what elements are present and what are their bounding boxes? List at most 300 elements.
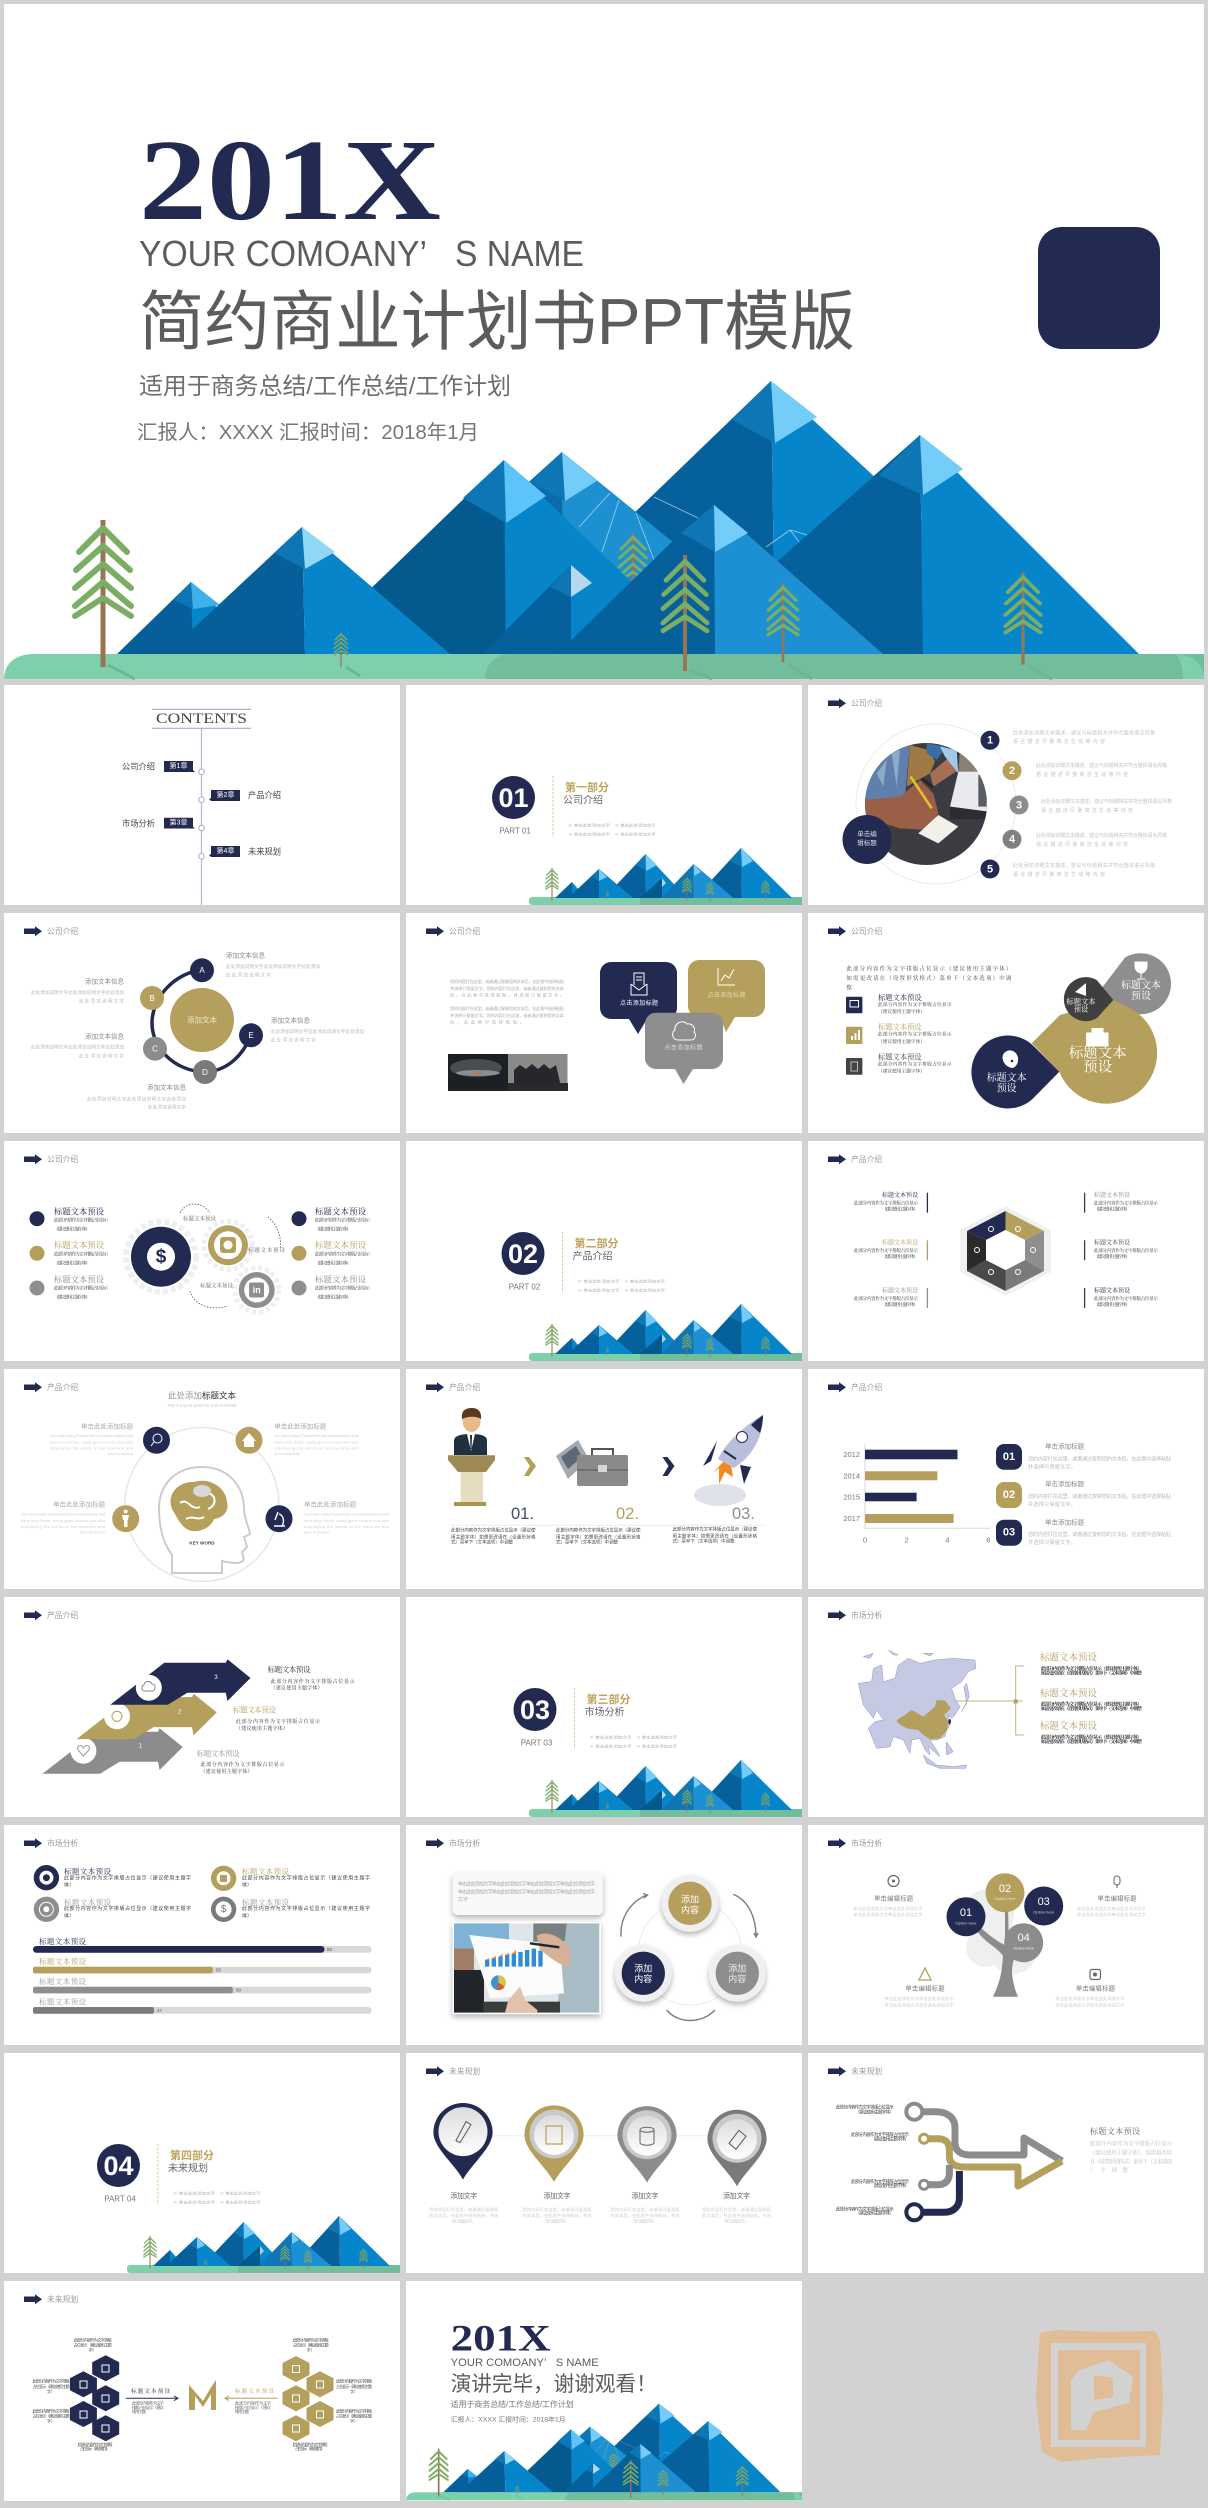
side labels left: 占位显示（建议使用） <box>80 2445 110 2451</box>
section heading group: 02 <box>508 1239 538 1269</box>
item: bottom left: 体） <box>64 1913 74 1920</box>
page label: 公司介绍 <box>47 1154 78 1164</box>
item 4: 此处添加详细文本描述，建议与标题相关并符合整体语言风格 <box>1036 832 1167 839</box>
label: bottom right: 单击此处添加文字单击此处添加文字 <box>1056 2002 1124 2008</box>
title: 简约商业计划书PPT模版 <box>139 285 855 358</box>
label E <box>271 1016 364 1044</box>
intro paragraph: 整 <box>846 983 852 991</box>
page label: 产品介绍 <box>47 1610 78 1620</box>
item 3: 3 <box>1016 799 1022 811</box>
gear: dollar: $ <box>156 1246 167 1268</box>
caption 3: 添加文字 <box>632 2191 658 2200</box>
diagram title: 此处添加标题文本 <box>168 1391 236 1401</box>
list item 3: 标题文本预设 <box>878 1052 922 1062</box>
item 1: 此部分内容作为文字排版占位显示（建议使用主题字体） <box>1041 1665 1142 1672</box>
thin ring <box>638 1901 742 2005</box>
item 2: 2 <box>1009 765 1015 777</box>
right list: 此部分内容作为文字排版占位显示 <box>315 1284 371 1292</box>
panel: closing slide <box>406 2281 802 2501</box>
item 02 <box>996 1479 1171 1508</box>
node B: B <box>149 994 155 1003</box>
step 3 text: 用主题字体）如需更改请在（设置形状格 <box>672 1532 758 1540</box>
item 01 <box>996 1442 1171 1470</box>
bubble: gray: 点击添加标题 <box>664 1044 702 1052</box>
right list: 标题文本预设 <box>315 1240 367 1250</box>
side labels left: 占位显示（建议使用主题 <box>74 2342 112 2348</box>
item 1: 1 <box>987 734 993 746</box>
list item 2: 标题文本预设 <box>878 1022 922 1032</box>
chevron gold <box>524 1457 536 1476</box>
list item 1: （建议使用主题字体） <box>878 1008 925 1015</box>
progress bar 60 <box>33 1976 372 1993</box>
node 04: 04 <box>1018 1932 1030 1944</box>
item: top left <box>34 1865 191 1890</box>
text: item 3: （建议使用主题字体） <box>271 1684 323 1692</box>
item: top left: 此部分内容作为文字排版占位显示（建议使用主题字 <box>64 1874 191 1881</box>
text block: top left: have your finale, being good colours and also <box>50 1440 133 1444</box>
progress bar 60: 60 <box>236 1988 242 1992</box>
side labels left: 字） <box>47 2418 55 2424</box>
label A <box>226 950 320 978</box>
text block: top left: displaying the words of the machine and <box>50 1447 133 1451</box>
paragraph 1 <box>450 978 565 998</box>
teardrop: gray <box>1098 953 1171 1014</box>
section notes <box>568 823 656 836</box>
step numbers: 03. <box>732 1505 755 1523</box>
right list: （建议使用主题字体） <box>315 1226 351 1232</box>
page label: 公司介绍 <box>47 926 78 936</box>
node 02 <box>986 1873 1024 1912</box>
item: top right: 此部分内容作为文字排版占位显示（建议使用主题字 <box>242 1874 370 1881</box>
node C <box>143 1037 167 1061</box>
caption 1: 择只保留文字。 <box>452 2218 476 2224</box>
caption 4: 的文本后，在此框中选择粘贴，并选 <box>702 2212 772 2219</box>
panel: future planning, merging arrow <box>808 2053 1204 2273</box>
panel: product intro, hexagon <box>808 1141 1204 1361</box>
label: top left: 单击此处添加文字单击此处添加文字 <box>854 1905 922 1912</box>
label: top right <box>1077 1876 1146 1918</box>
caption 1: 添加文字 <box>450 2191 477 2200</box>
contents heading <box>152 709 251 728</box>
section heading group: 市场分析 <box>584 1706 624 1718</box>
panel: product intro, stacked arrows <box>4 1597 400 1817</box>
list item 2 <box>846 1022 952 1045</box>
panel: product intro, three steps <box>406 1369 802 1589</box>
label A: 此处添加说明文字 <box>226 972 271 978</box>
side labels left: 此部分内容作为文字排版 <box>32 2378 70 2384</box>
gear labels <box>183 1215 285 1290</box>
caption 1: 您的内容打在这里，或者通过复制您 <box>429 2206 498 2213</box>
caption 3 <box>610 2191 680 2224</box>
panel: company intro, ring diagram <box>4 913 400 1133</box>
panel: company intro, gears <box>4 1141 400 1361</box>
left labels: 此部分内容作为文字排版占位显示 <box>851 2131 910 2138</box>
progress bar 55 <box>33 1956 372 1973</box>
page label: 未来规划 <box>851 2066 882 2076</box>
chapter 4: 未来规划 <box>248 846 281 856</box>
circle: navy <box>615 1945 672 2002</box>
panel: market analysis, tree <box>808 1825 1204 2045</box>
section heading group: ※ 单击此处添加文字 <box>173 2199 216 2204</box>
node A <box>190 958 214 982</box>
node: microscope <box>266 1505 292 1532</box>
section heading group <box>502 1232 666 1293</box>
centre labels: 使用主题 <box>132 2408 147 2415</box>
section heading group: ※ 单击此处添加文字 <box>578 1287 620 1292</box>
section heading group: ※ 单击此处添加文字 <box>624 1279 666 1284</box>
item 5: 此处添加详细文本描述，建议与标题相关并符合整体语言风格 <box>1013 862 1155 869</box>
item 2 <box>1040 1687 1142 1712</box>
item: bottom right: $ <box>221 1904 227 1915</box>
section number badge: 01 <box>498 783 529 813</box>
left bars <box>926 1193 928 1213</box>
chapter 1: 第1章 <box>170 761 187 770</box>
map of Asia <box>858 1650 976 1768</box>
left bar gray <box>926 1288 928 1308</box>
part label: PART 01 <box>499 826 531 836</box>
step 2 text: 此部分内容作为文字排版占位显示（建议使 <box>556 1526 641 1534</box>
step 2 text: 用主题字体）如需更改请在（设置形状格 <box>556 1534 641 1540</box>
text card <box>453 1872 603 1915</box>
progress bar 37: 标题文本预设 <box>39 1996 86 2006</box>
intro paragraph: 如需更改请在（设置形状格式）菜单下（文本选项）中调 <box>846 974 1012 982</box>
photo: chart review <box>452 1922 601 2014</box>
bar chart: 6 <box>986 1536 990 1544</box>
text: item 3 <box>268 1664 356 1692</box>
right list: （建议使用主题字体） <box>315 1260 351 1266</box>
section heading group <box>97 2144 261 2205</box>
section heading group: 第二部分 <box>574 1236 618 1250</box>
section heading group: 第三部分 <box>586 1692 630 1706</box>
item: top right: 标题文本预设 <box>242 1866 290 1876</box>
bar chart: 0 <box>863 1536 867 1544</box>
company name: YOUR COMOANY’ S NAME <box>139 233 584 274</box>
hexagon ring <box>960 1206 1051 1296</box>
label C <box>31 1032 124 1060</box>
left list: （建议使用主题字体） <box>54 1226 90 1232</box>
right labels: 标题文本预设 <box>1094 1191 1130 1199</box>
paragraph 1: 您的内容打在这里，或者通过复制您的文本后，在此框中选择粘贴 <box>450 978 564 985</box>
page label: 市场分析 <box>47 1838 78 1848</box>
paragraph 2: 您的内容打在这里，或者通过复制您的文本后，在此框中选择粘贴 <box>450 1005 564 1012</box>
item: bottom left: 标题文本预设 <box>64 1897 112 1907</box>
label D: 此处添加说明文字此处添加说明文字此处添加 <box>87 1096 186 1102</box>
section heading group: ※ 单击此处添加文字 <box>220 2199 261 2204</box>
text block: bottom left <box>21 1500 106 1535</box>
side labels right: 字） <box>350 2418 358 2424</box>
step numbers: 02. <box>616 1505 639 1523</box>
caption 2: 添加文字 <box>544 2191 570 2200</box>
node: home <box>236 1427 262 1454</box>
connector bracket <box>957 1666 1024 1735</box>
section heading group: ※ 单击此处添加文字 <box>624 1287 666 1292</box>
page label: 未来规划 <box>449 2066 480 2076</box>
step 1 text: 式）菜单下（文本选项）中调整 <box>451 1538 514 1546</box>
panel: section 01 <box>406 685 802 905</box>
text block: bottom left: You have many PowerPoint text presentations that <box>21 1513 106 1517</box>
teardrop: navy: 标题文本 <box>987 1071 1027 1084</box>
left labels: 此部分内容作为文字排版占位显示 <box>836 2206 894 2212</box>
item 02: 您的内容打在这里，或者通过复制您的文本后，在此框中选择粘贴 <box>1028 1492 1171 1500</box>
chapter 2 <box>209 790 281 801</box>
text block: bottom right: You have many PowerPoint text presentations that <box>304 1513 390 1517</box>
text block: top right: You have many PowerPoint text presentations that <box>274 1434 359 1438</box>
label A: 此处添加说明文字此处添加说明文字此处添加 <box>226 963 320 970</box>
label: bottom left: 单击编辑标题 <box>906 1984 945 1992</box>
section heading group: PART 04 <box>104 2194 136 2204</box>
centre labels: 排版占位显示（建议 <box>235 2404 272 2411</box>
node E <box>239 1023 263 1047</box>
left labels: （建议使用主题字体） <box>882 1301 918 1308</box>
step 3 text <box>672 1526 758 1544</box>
left list: （建议使用主题字体） <box>54 1260 90 1266</box>
right list: 此部分内容作为文字排版占位显示 <box>315 1250 371 1258</box>
label E: 此处添加说明文字此处添加说明文字此处添加 <box>271 1028 364 1035</box>
item 03: 单击添加标题 <box>1045 1518 1084 1526</box>
brain <box>171 1481 228 1531</box>
photo: team <box>448 1054 568 1091</box>
centre ellipse <box>170 988 234 1052</box>
chapter 4: 第4章 <box>217 846 234 855</box>
panel: market analysis, progress bars <box>4 1825 400 2045</box>
gear labels: 标题文本预设 <box>183 1215 216 1223</box>
progress bar 55: 55 <box>216 1968 222 1972</box>
section heading group: ※ 单击此处添加文字 <box>220 2191 261 2196</box>
gear: dollar <box>126 1222 196 1292</box>
chapter 3: 第3章 <box>170 818 187 827</box>
right text <box>1090 2126 1172 2174</box>
item: bottom right: 体） <box>242 1913 252 1920</box>
page label: 产品介绍 <box>449 1382 480 1392</box>
node D: D <box>202 1068 208 1077</box>
section heading group: ※ 单击此处添加文字 <box>590 1735 632 1740</box>
side labels left: 字） <box>47 2388 55 2394</box>
label B: 添加文本信息 <box>85 976 124 986</box>
node 04: Option here <box>1013 1946 1035 1950</box>
text: item 2: 标题文本预设 <box>233 1704 276 1714</box>
left labels <box>836 2104 910 2216</box>
node 01 <box>946 1897 986 1936</box>
centre labels: 此部分内容作为文字 <box>132 2400 164 2406</box>
page label: 公司介绍 <box>851 698 882 708</box>
chapter 3 <box>122 818 195 828</box>
item 3: 此处添加详细文本描述，建议与标题相关并符合整体语言风格 <box>1041 798 1172 805</box>
teardrop: dark: 标题文本 <box>1066 997 1096 1006</box>
chapter 4 <box>209 846 281 857</box>
text block: top left: You have many PowerPoint text presentations that <box>50 1434 134 1438</box>
page label: 市场分析 <box>851 1838 882 1848</box>
gear: linkedin <box>235 1268 279 1312</box>
label C: 添加文本信息 <box>85 1032 124 1040</box>
item: bottom left: 此部分内容作为文字排版占位显示（建议使用主题字 <box>64 1905 191 1912</box>
item 1: 如需更改请在（设置形状格式）菜单下（文本选项）中调整 <box>1041 1669 1142 1676</box>
centre labels: 排版占位显示（建议 <box>132 2404 165 2411</box>
side labels right: 占位显示（建议使用） <box>295 2445 325 2451</box>
item 5 <box>980 860 1155 878</box>
label: bottom right: 单击此处添加文字单击此处添加文字 <box>1056 1995 1124 2002</box>
panel: market analysis, map <box>808 1597 1204 1817</box>
side labels right: 此部分内容作为文字排版 <box>293 2336 329 2342</box>
item: bottom right: 此部分内容作为文字排版占位显示（建议使用主题字 <box>242 1905 370 1912</box>
text block: bottom right: your business <box>304 1531 329 1535</box>
step 1 text <box>451 1526 536 1546</box>
left labels: （建议使用主题字体） <box>882 1206 918 1212</box>
item: bottom right: 标题文本预设 <box>242 1897 290 1907</box>
label B: 此处添加说明文字此处添加说明文字此处添加 <box>31 989 124 996</box>
item 5: 语言描述尽量简洁生动等内容 <box>1013 871 1105 878</box>
connector dot <box>1014 1700 1018 1704</box>
item 3: 此部分内容作为文字排版占位显示（建议使用主题字体） <box>1041 1734 1142 1740</box>
item 4 <box>1002 830 1167 849</box>
label: top left: 单击此处添加文字单击此处添加文字 <box>854 1911 922 1918</box>
text block: bottom right: have your finale, being good colours and also <box>304 1519 389 1523</box>
icon: briefcase and papers <box>556 1440 628 1486</box>
left labels: 标题文本预设 <box>882 1239 918 1247</box>
item 2: 语言描述尽量简洁生动等内容 <box>1036 771 1128 778</box>
thin ring <box>856 724 1016 884</box>
side labels left: 占位显示（建议使用主题 <box>32 2412 70 2418</box>
item 3: 标题文本预设 <box>1040 1720 1097 1732</box>
side labels right: 占位显示（建议使用主题 <box>293 2342 329 2348</box>
progress bar 37: 37 <box>157 2008 163 2013</box>
text block: bottom left: your business <box>80 1531 105 1535</box>
item: top left: 标题文本预设 <box>64 1866 112 1876</box>
left bar gold <box>926 1240 928 1260</box>
paragraph 1: 后，在此框中选择粘贴，并选择只保留文字。 <box>450 992 564 998</box>
caption 2: 您的内容打在这里，或者通过复制您 <box>522 2206 592 2213</box>
side labels right: 占位显示（建议使用主题 <box>336 2383 372 2389</box>
left list <box>30 1206 109 1300</box>
teardrop: gold <box>1032 1000 1157 1104</box>
label D <box>87 1082 186 1110</box>
right list <box>292 1206 371 1300</box>
circle: gold: 添加 <box>681 1894 699 1904</box>
right labels <box>1094 1191 1158 1308</box>
left labels: 此部分内容作为文字排版占位显示 <box>851 2178 910 2185</box>
left list: （建议使用主题字体） <box>54 1294 90 1300</box>
section title: 公司介绍 <box>563 794 603 806</box>
side labels left: 此部分内容作为文字排版 <box>78 2441 112 2447</box>
illustration: mountains <box>406 2404 802 2500</box>
panel: company intro, teardrops <box>808 913 1204 1133</box>
item 1: 标题文本预设 <box>1040 1651 1097 1663</box>
left labels: 此部分内容作为文字排版占位显示 <box>854 1295 918 1302</box>
node A: A <box>199 966 205 975</box>
item: top right <box>211 1866 370 1891</box>
caption 2 <box>522 2191 592 2224</box>
item 4: 语言描述尽量简洁生动等内容 <box>1036 841 1128 848</box>
label: top left: 单击编辑标题 <box>874 1894 914 1902</box>
centre labels: 标题文本预设 <box>235 2387 274 2395</box>
panel: section 04 <box>4 2053 400 2273</box>
label: bottom left <box>884 1968 954 2008</box>
ring arcs <box>152 970 251 1072</box>
illustration: mountains and trees <box>4 381 1204 679</box>
step numbers: 01. <box>511 1505 534 1523</box>
right labels: 标题文本预设 <box>1094 1286 1130 1294</box>
list item 3: 此部分内容作为文字排版占位显示 <box>878 1060 952 1068</box>
item 5: 5 <box>987 863 993 875</box>
node C: C <box>152 1044 158 1054</box>
panel: future planning, map pins <box>406 2053 802 2273</box>
side labels left <box>32 2336 112 2451</box>
right list: 标题文本预设 <box>315 1206 367 1216</box>
connecting line <box>463 2135 737 2137</box>
key word: KEY WORD <box>189 1540 215 1546</box>
chapter 2: 产品介绍 <box>248 790 281 800</box>
step 3 text: 此部分内容作为文字排版占位显示（建议使 <box>672 1526 758 1532</box>
left labels: 此部分内容作为文字排版占位显示 <box>836 2104 894 2110</box>
label: top right: 单击编辑标题 <box>1098 1894 1137 1902</box>
circle: navy: 添加 <box>634 1963 652 1973</box>
node 01: 01 <box>960 1907 972 1919</box>
label: bottom right <box>1056 1970 1124 2008</box>
bar chart: 2017 <box>843 1514 860 1523</box>
bar chart: 2012 <box>843 1450 860 1459</box>
chapter 2: 第2章 <box>217 790 234 799</box>
label: top right: 单击此处添加文字单击此处添加文字 <box>1077 1911 1146 1918</box>
bar chart: 4 <box>945 1536 949 1544</box>
text: item 3: 此部分内容作为文字排版占位显示 <box>271 1678 356 1685</box>
list item 1: 此部分内容作为文字排版占位显示 <box>878 1001 952 1008</box>
badge: edit title <box>842 815 892 864</box>
text: item 2: （建议使用主题字体） <box>236 1725 288 1732</box>
navy rounded square <box>1038 227 1160 349</box>
teardrop: dark <box>1064 977 1113 1021</box>
side labels right: 此部分内容作为文字排版 <box>336 2408 372 2414</box>
node 03 <box>1024 1886 1063 1926</box>
progress bar 37 <box>33 1996 372 2014</box>
section heading group: 03 <box>520 1695 550 1725</box>
text block: bottom right: displaying the words of the machine and <box>304 1525 389 1529</box>
page label: 公司介绍 <box>851 926 882 936</box>
page label: 市场分析 <box>449 1838 480 1848</box>
left labels: （建议使用主题字体） <box>871 2182 909 2189</box>
text: item 2: 此部分内容作为文字排版占位显示 <box>236 1718 321 1725</box>
item 3: 如需更改请在（设置形状格式）菜单下（文本选项）中调整 <box>1041 1738 1142 1745</box>
section notes: ※ 单击此处添加文字 <box>568 823 611 828</box>
centre logo <box>189 2380 216 2410</box>
item 02: 02 <box>1003 1489 1015 1501</box>
icon: watermark stamp <box>1036 2330 1163 2462</box>
section heading group: PART 03 <box>521 1738 553 1748</box>
arrow 3 navy: 3 <box>214 1675 218 1681</box>
paragraph 2: 并选择只保留文字。您的内容打在这里，或者通过复制您的文本 <box>450 1012 565 1019</box>
section heading group: ※ 单击此处添加文字 <box>590 1743 632 1748</box>
panel: market analysis, circles and photo <box>406 1825 802 2045</box>
step numbers <box>511 1505 755 1523</box>
text block: top right: 单击此处添加标题 <box>274 1422 327 1430</box>
item: top right: 体） <box>242 1882 252 1889</box>
pin 4 <box>707 2110 767 2186</box>
left labels: 此部分内容作为文字排版占位显示 <box>854 1247 918 1254</box>
text block: bottom left: 单击此处添加标题 <box>53 1500 106 1508</box>
page label: 产品介绍 <box>851 1382 882 1392</box>
list item 1 <box>846 993 952 1015</box>
teardrop: dark: 预设 <box>1074 1004 1089 1014</box>
left labels: 标题文本预设 <box>882 1191 918 1199</box>
step 3 text: 式）菜单下（文本选项）中调整 <box>672 1538 735 1544</box>
step 2 text: 式）菜单下（文本选项）中调整 <box>556 1538 618 1546</box>
caption 4: 择只保留文字。 <box>724 2218 748 2224</box>
list item 3 <box>846 1052 952 1075</box>
side labels left: 此部分内容作为文字排版 <box>74 2336 112 2342</box>
teardrop: navy <box>971 1036 1059 1108</box>
item: bottom right <box>211 1897 370 1922</box>
item: bottom left <box>34 1897 191 1922</box>
arrow 2 gold <box>76 1694 217 1739</box>
left list: 此部分内容作为文字排版占位显示 <box>54 1250 109 1258</box>
